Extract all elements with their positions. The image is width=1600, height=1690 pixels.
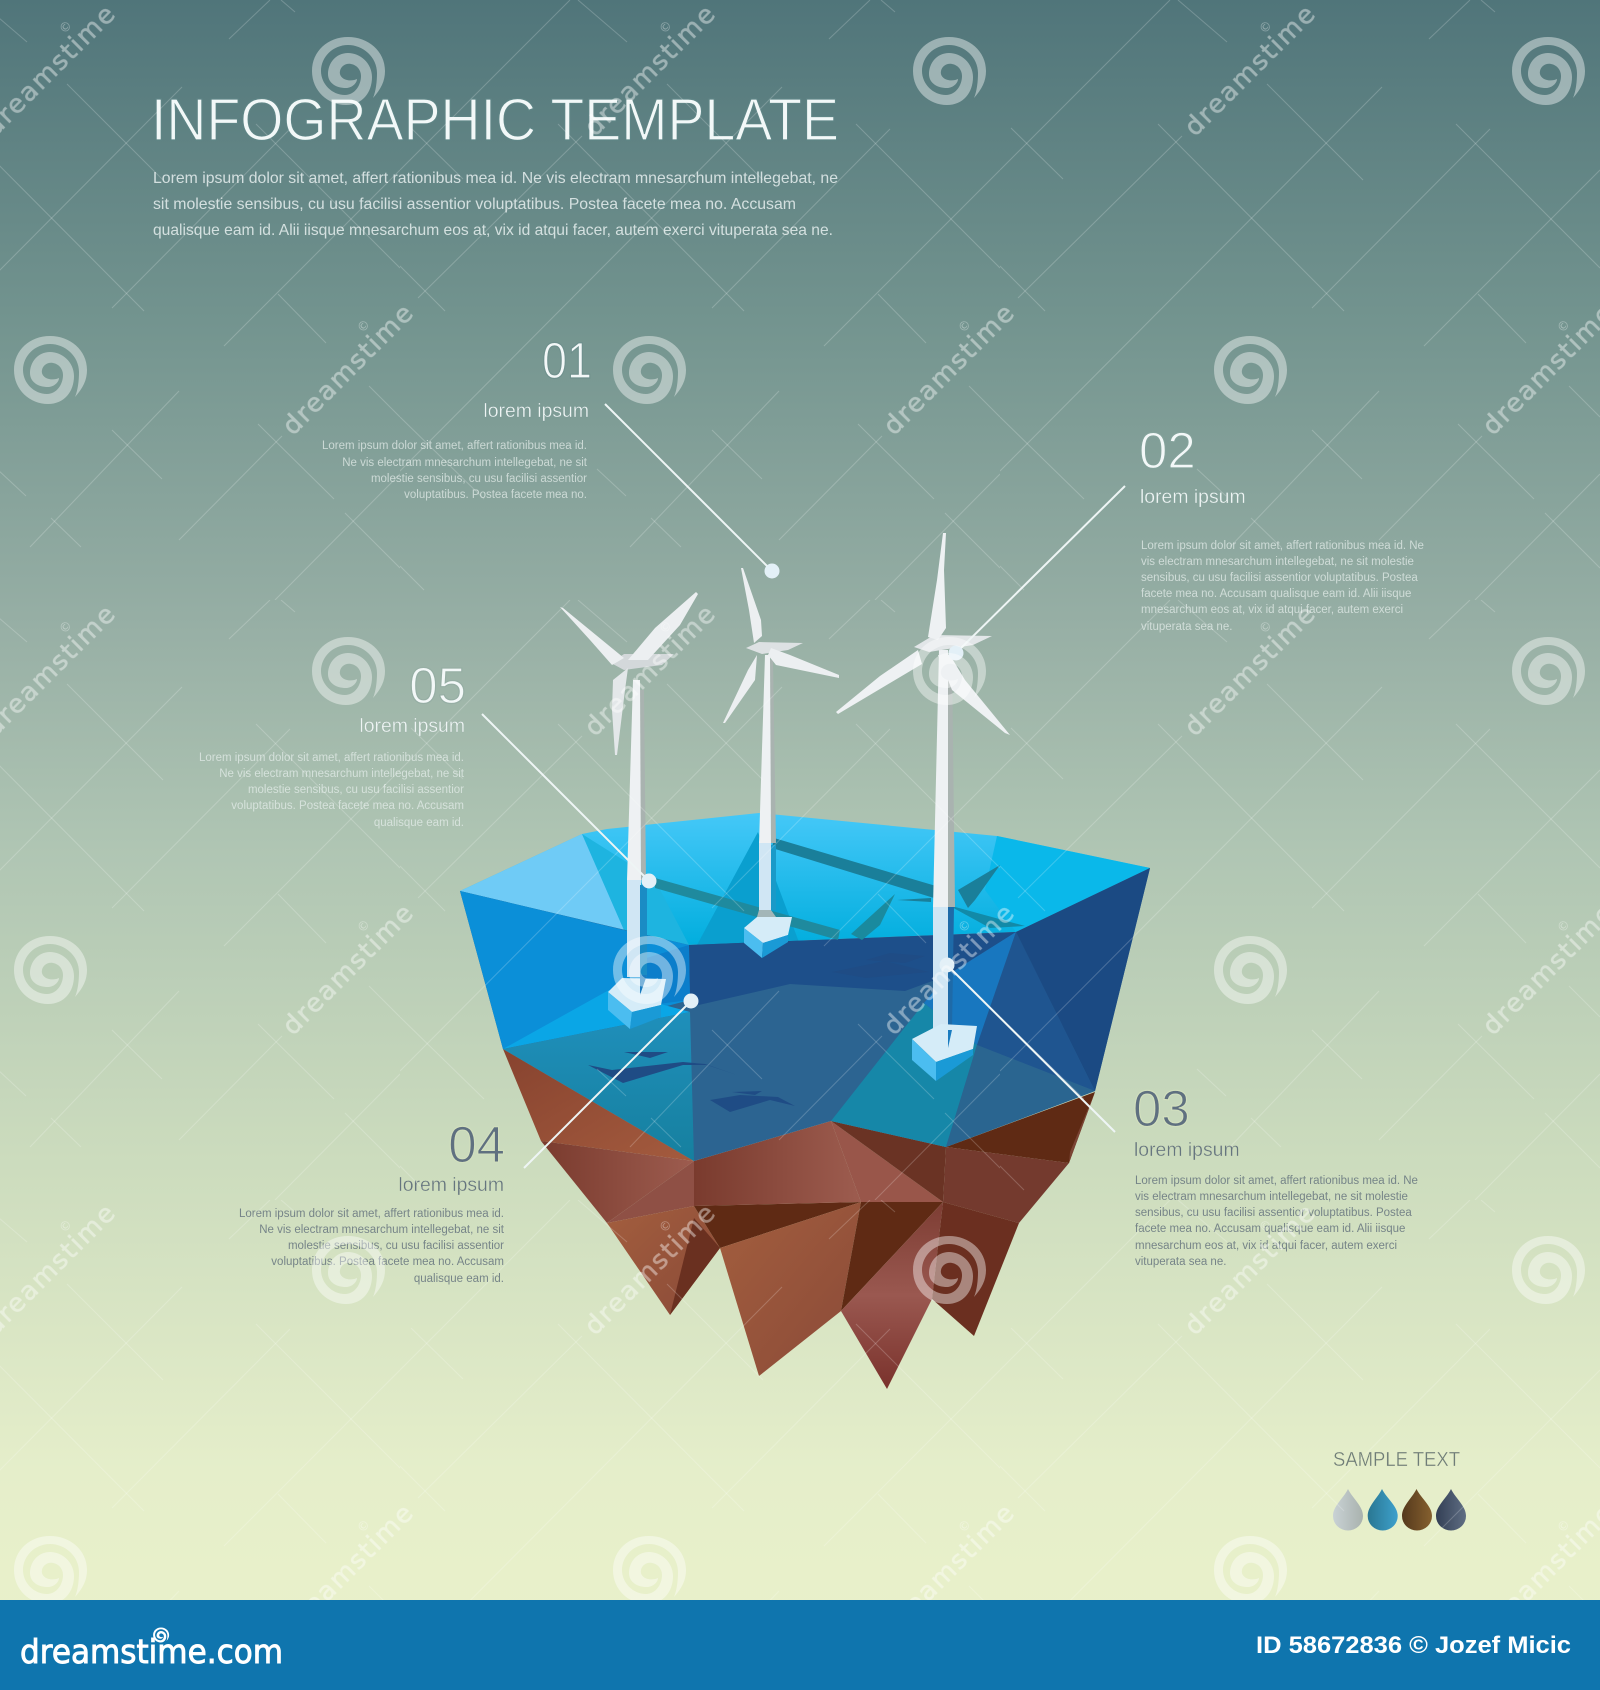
callout 01 xyxy=(322,332,592,501)
watermark text: © xyxy=(1256,618,1275,636)
number 05: 05 xyxy=(409,657,466,714)
watermark text: dreamstime xyxy=(878,299,1020,441)
intro text block: Lorem ipsum dolor sit amet, affert rationibus mea id. Ne vis electram mnesarchum intellegebat, ne xyxy=(153,170,838,187)
label 03: lorem ipsum xyxy=(1134,1139,1240,1161)
label 01: lorem ipsum xyxy=(483,400,589,422)
footer credit: ID 58672836 © Jozef Micic xyxy=(1256,1632,1571,1659)
text 02: vis electram mnesarchum intellegebat, ne sit molestie xyxy=(1141,556,1414,568)
water side faces xyxy=(460,868,1150,1161)
text 01 xyxy=(322,440,588,501)
text 01: Lorem ipsum dolor sit amet, affert rationibus mea id. xyxy=(322,440,587,452)
watermark text: © xyxy=(1554,1517,1573,1535)
number 02: 02 xyxy=(1139,422,1196,479)
intro text block: qualisque eam id. Alii iisque mnesarchum eos at, vix id atqui facer, autem exerci vituperata sea ne. xyxy=(153,222,833,239)
text 05: Ne vis electram mnesarchum intellegebat, ne sit xyxy=(219,768,465,780)
watermark text: © xyxy=(354,1517,373,1535)
watermark text: © xyxy=(56,618,75,636)
watermark text: © xyxy=(656,618,675,636)
text 05: voluptatibus. Postea facete mea no. Accusam xyxy=(231,800,464,812)
fish shadows xyxy=(588,953,929,1112)
watermark text: dreamstime xyxy=(1179,0,1321,142)
watermark text: dreamstime xyxy=(1179,600,1321,742)
text 04: molestie sensibus, cu usu facilisi assentior xyxy=(288,1240,504,1252)
watermark text: dreamstime xyxy=(579,1199,721,1341)
callout 04 xyxy=(239,1116,505,1285)
text 05: qualisque eam id. xyxy=(374,817,464,829)
watermark text: © xyxy=(656,18,675,36)
watermark text: © xyxy=(1554,917,1573,935)
watermark text: © xyxy=(1256,1217,1275,1235)
text 02: facete mea no. Accusam qualisque eam id. Alii iisque xyxy=(1141,588,1411,600)
text 02: Lorem ipsum dolor sit amet, affert rationibus mea id. Ne xyxy=(1141,540,1424,552)
watermark text: dreamstime xyxy=(277,899,419,1041)
callout 05 xyxy=(199,657,466,829)
panel: floating island xyxy=(460,813,1150,1389)
callout 03 xyxy=(1133,1080,1418,1268)
text 05 xyxy=(199,752,465,829)
intro text block: sit molestie sensibus, cu usu facilisi assentior voluptatibus. Postea facete mea no. Accusam xyxy=(153,196,796,213)
watermark text: © xyxy=(656,1217,675,1235)
text 03: vituperata sea ne. xyxy=(1135,1256,1226,1268)
number 04: 04 xyxy=(448,1116,505,1173)
text 03: Lorem ipsum dolor sit amet, affert rationibus mea id. Ne xyxy=(1135,1175,1418,1187)
watermark text: © xyxy=(1256,18,1275,36)
text 02: mnesarchum eos at, vix id atqui facer, autem exerci xyxy=(1141,604,1403,616)
watermark text: © xyxy=(354,917,373,935)
callout 02 xyxy=(1139,422,1424,633)
watermark text: dreamstime xyxy=(878,899,1020,1041)
intro text block xyxy=(153,170,838,239)
text 04 xyxy=(239,1208,505,1285)
title: INFOGRAPHIC TEMPLATE xyxy=(151,87,839,153)
label 05: lorem ipsum xyxy=(359,715,465,737)
watermark text: © xyxy=(354,317,373,335)
text 03: mnesarchum eos at, vix id atqui facer, autem exerci xyxy=(1135,1240,1397,1252)
text 04: voluptatibus. Postea facete mea no. Accusam xyxy=(271,1256,504,1268)
text 04: qualisque eam id. xyxy=(414,1273,504,1285)
text 05: Lorem ipsum dolor sit amet, affert rationibus mea id. xyxy=(199,752,464,764)
watermark text: © xyxy=(955,1517,974,1535)
watermark text: © xyxy=(1554,317,1573,335)
watermark text: © xyxy=(955,917,974,935)
water top surface xyxy=(460,813,1150,945)
text 03: facete mea no. Accusam qualisque eam id. Alii iisque xyxy=(1135,1223,1405,1235)
text 03: vis electram mnesarchum intellegebat, ne sit molestie xyxy=(1135,1191,1408,1203)
watermark text: © xyxy=(56,1217,75,1235)
text 04: Lorem ipsum dolor sit amet, affert rationibus mea id. xyxy=(239,1208,504,1220)
text 04: Ne vis electram mnesarchum intellegebat, ne sit xyxy=(259,1224,505,1236)
earth underside xyxy=(503,1049,1095,1389)
text 02: vituperata sea ne. xyxy=(1141,621,1232,633)
watermark text: dreamstime xyxy=(579,600,721,742)
turbine 3 xyxy=(836,533,1010,1081)
label 02: lorem ipsum xyxy=(1140,486,1246,508)
turbine 2 xyxy=(723,568,839,958)
watermark text: © xyxy=(56,18,75,36)
text 01: Ne vis electram mnesarchum intellegebat, ne sit xyxy=(342,457,588,469)
text 01: voluptatibus. Postea facete mea no. xyxy=(404,489,587,501)
watermark text: dreamstime xyxy=(878,1499,1020,1641)
text 05: molestie sensibus, cu usu facilisi assentior xyxy=(248,784,464,796)
number 01: 01 xyxy=(542,332,592,389)
watermark text: dreamstime xyxy=(277,299,419,441)
text 03 xyxy=(1135,1175,1418,1268)
text 02: sensibus, cu usu facilisi assentior voluptatibus. Postea xyxy=(1141,572,1418,584)
turbine 1 xyxy=(560,592,698,1029)
text 03: sensibus, cu usu facilisi assentior voluptatibus. Postea xyxy=(1135,1207,1412,1219)
footer logo text: dreamstime.com xyxy=(20,1632,283,1671)
text 02 xyxy=(1141,540,1424,633)
number 03: 03 xyxy=(1133,1080,1190,1137)
legend drops xyxy=(1333,1489,1466,1530)
label 04: lorem ipsum xyxy=(398,1174,504,1196)
watermark text: dreamstime xyxy=(579,0,721,142)
tower shadows on water xyxy=(655,838,1025,940)
footer logo spiral xyxy=(153,1628,169,1642)
text 01: molestie sensibus, cu usu facilisi assentior xyxy=(371,473,587,485)
watermark text: dreamstime xyxy=(277,1499,419,1641)
footer bar xyxy=(0,1600,1600,1690)
leader lines and dots xyxy=(482,404,1125,1168)
watermark text: dreamstime xyxy=(1179,1199,1321,1341)
legend label: SAMPLE TEXT xyxy=(1333,1448,1460,1471)
watermark text: © xyxy=(955,317,974,335)
